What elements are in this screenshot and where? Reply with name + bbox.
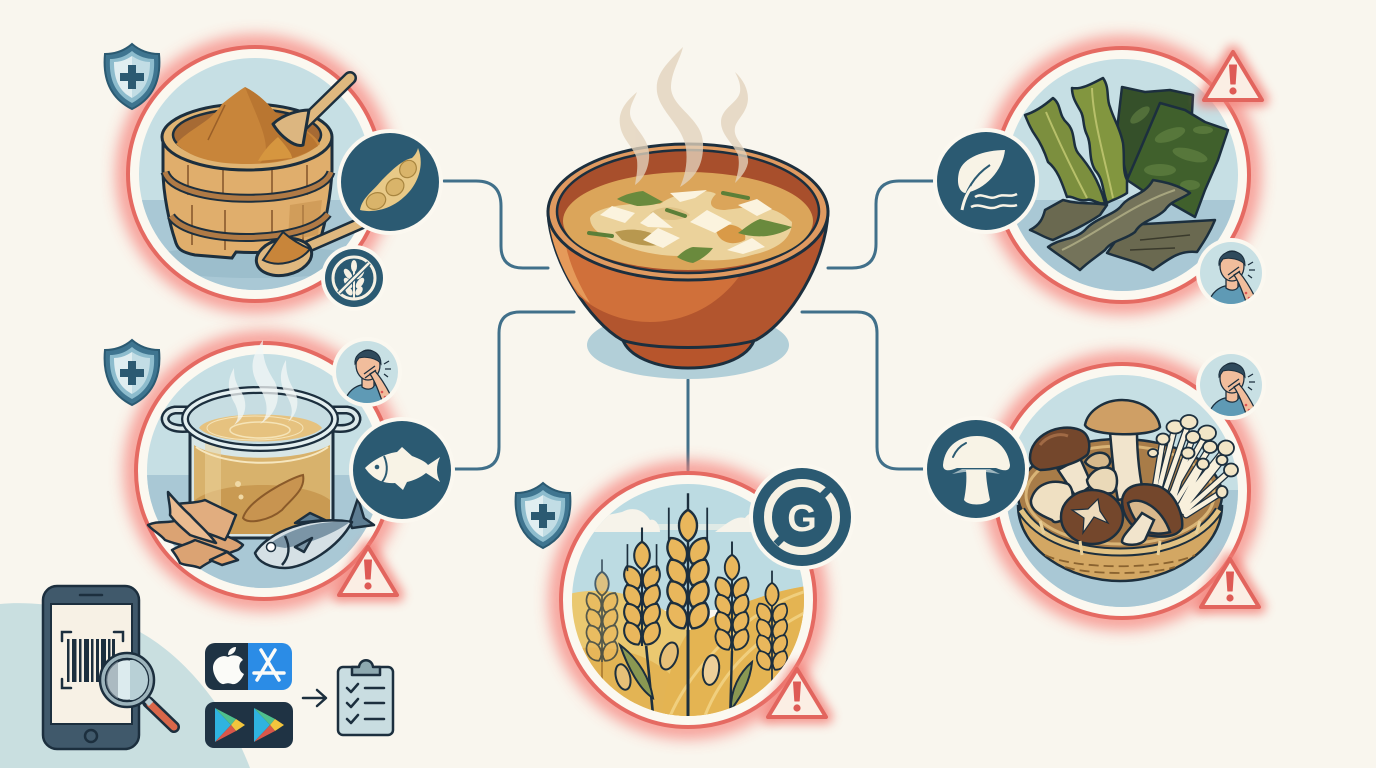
app store tile bbox=[205, 643, 292, 690]
wheat leaves and grains bbox=[613, 640, 752, 710]
icon: health shield bbox=[516, 483, 570, 548]
badge: mushroom bbox=[923, 416, 1029, 522]
connector lines bbox=[444, 181, 935, 470]
alert ring bbox=[126, 45, 384, 303]
bamboo basket back bbox=[1018, 439, 1222, 551]
badge: soybean bbox=[337, 129, 443, 235]
central miso soup bowl bbox=[540, 47, 828, 379]
badge: no wheat bbox=[321, 245, 387, 311]
woven basket front bbox=[1018, 505, 1222, 581]
steam bbox=[620, 47, 748, 187]
pot handles bbox=[165, 410, 357, 429]
icon: warning triangle bbox=[1204, 52, 1262, 100]
google play tile bbox=[205, 702, 293, 748]
corner backdrop bbox=[0, 603, 250, 768]
panel: miso paste tub bbox=[105, 44, 443, 311]
wakame and scallions bbox=[617, 191, 792, 263]
panel: barcode scanning app bbox=[0, 586, 393, 768]
backdrop bbox=[147, 354, 373, 588]
icon: allergic reaction person bbox=[1196, 238, 1266, 308]
magnifying glass bbox=[100, 653, 174, 727]
wheat ears bbox=[583, 493, 791, 720]
badge: fish bbox=[349, 417, 455, 523]
glass pot with broth bbox=[165, 340, 357, 538]
shiitake bbox=[1061, 490, 1123, 544]
panel: mushrooms bbox=[923, 350, 1266, 620]
backdrop bbox=[139, 58, 364, 290]
bowl shadow bbox=[587, 311, 789, 379]
bowl body bbox=[546, 210, 830, 349]
katsuobushi flakes bbox=[148, 492, 243, 568]
wooden tub bbox=[162, 104, 332, 258]
icon: warning triangle bbox=[339, 547, 397, 595]
backdrop bbox=[1008, 375, 1238, 607]
miso soup bbox=[563, 172, 813, 270]
icon: health shield bbox=[105, 44, 159, 109]
arrow bbox=[303, 690, 326, 706]
tall tan mushroom bbox=[1085, 400, 1160, 500]
badge: gluten free G bbox=[749, 464, 855, 570]
mackerel bbox=[255, 498, 374, 568]
nori sheets bbox=[1117, 87, 1228, 217]
alert ring bbox=[559, 471, 817, 729]
alert ring bbox=[993, 362, 1251, 620]
field and sky bbox=[572, 484, 804, 716]
backdrop bbox=[1013, 59, 1238, 291]
tofu cubes bbox=[600, 190, 772, 254]
phone with barcode bbox=[43, 586, 139, 749]
icon: health shield bbox=[105, 340, 159, 405]
bowl foot bbox=[621, 332, 756, 368]
icon: allergic reaction person bbox=[332, 337, 402, 407]
badge: sea leaf bbox=[933, 128, 1039, 234]
alert ring bbox=[134, 341, 394, 601]
alert ring bbox=[993, 46, 1251, 304]
clipboard checklist bbox=[338, 660, 393, 735]
miso mound bbox=[176, 87, 320, 164]
steam bbox=[229, 340, 297, 425]
enoki mushrooms bbox=[1148, 415, 1238, 515]
bowl rim and interior bbox=[548, 144, 828, 280]
panel: dashi stock pot bbox=[105, 337, 455, 601]
small pale mushrooms bbox=[1031, 453, 1117, 522]
badge: gluten free G: G bbox=[787, 498, 817, 540]
wooden spoon with miso bbox=[253, 222, 364, 280]
dried kombu strips bbox=[1030, 180, 1215, 270]
brown left mushroom bbox=[1030, 428, 1092, 497]
wooden spoon in tub bbox=[273, 78, 350, 145]
icon: allergic reaction person bbox=[1196, 350, 1266, 420]
pot rim bbox=[185, 390, 335, 448]
portobello bbox=[1122, 484, 1182, 545]
icon: warning triangle bbox=[1201, 559, 1259, 607]
icon: warning triangle bbox=[768, 669, 826, 717]
panel: wheat bbox=[516, 464, 855, 730]
panel: seaweed bbox=[933, 46, 1266, 308]
kelp leaves bbox=[1025, 78, 1127, 203]
